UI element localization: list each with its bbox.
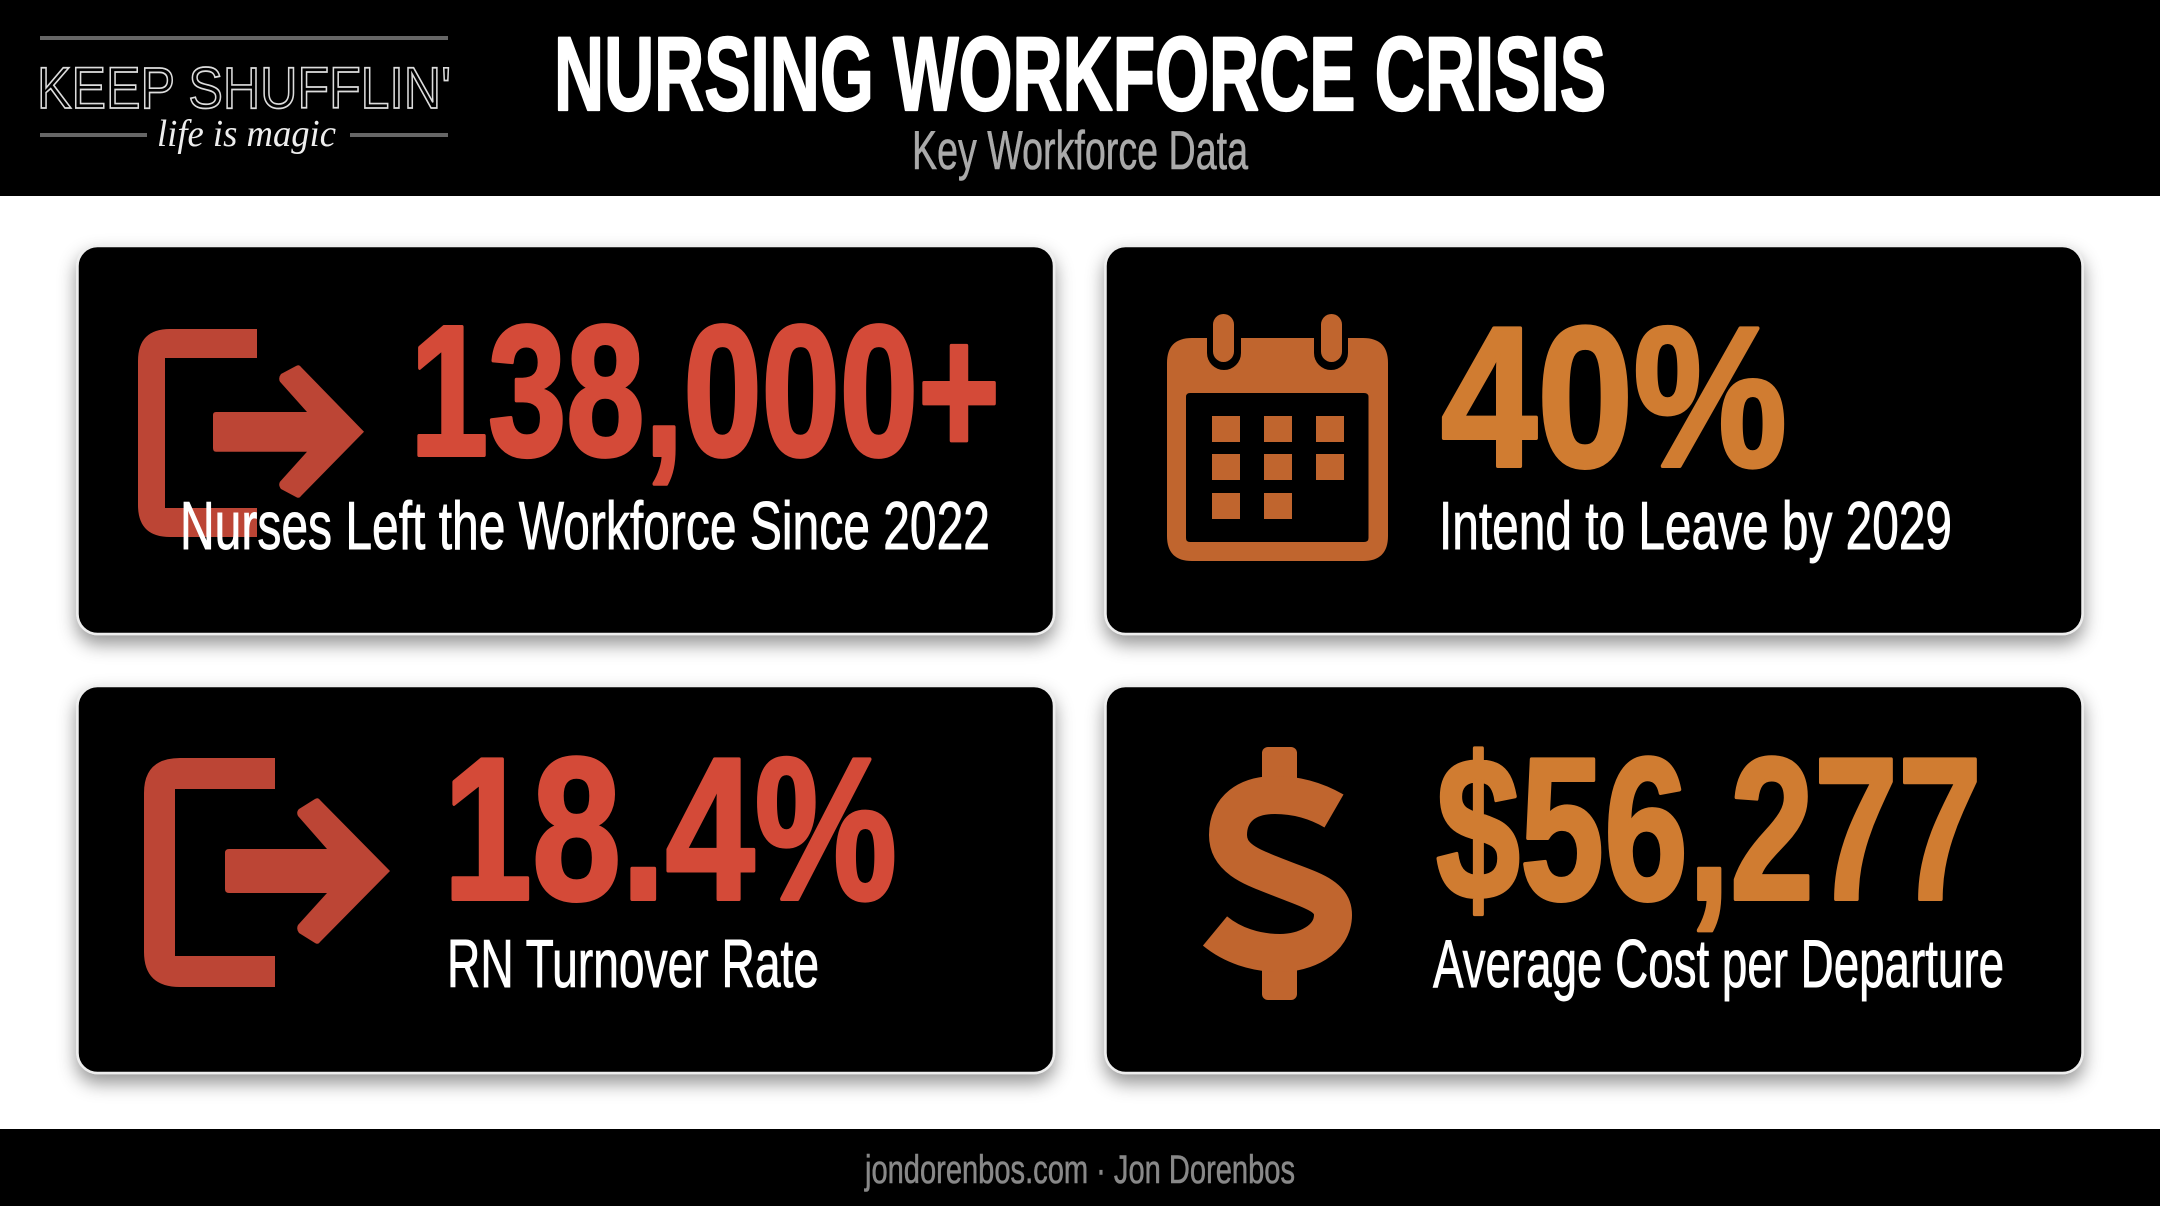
icon: calendar bbox=[1167, 314, 1388, 561]
stat: 18.4%: 18.4% bbox=[443, 716, 897, 943]
footer text: jondorenbos.com · Jon Dorenbos bbox=[864, 1148, 1295, 1192]
icon: exit arrow bbox=[138, 329, 364, 537]
subtitle: Key Workforce Data bbox=[912, 119, 1248, 181]
panel: intend to leave bbox=[1106, 246, 2082, 634]
title: NURSING WORKFORCE CRISIS bbox=[554, 16, 1606, 133]
footer band bbox=[0, 1129, 2160, 1206]
label: RN Turnover Rate bbox=[447, 926, 819, 1002]
logo: Keep Shufflin': life is magic bbox=[157, 113, 336, 155]
logo: Keep Shufflin' bbox=[37, 36, 451, 155]
panel: turnover bbox=[78, 686, 1054, 1073]
stat: $56,277: $56,277 bbox=[1436, 716, 1982, 943]
stat: 138,000+: 138,000+ bbox=[410, 288, 1000, 495]
icon: exit arrow bbox=[144, 758, 390, 987]
icon: dollar sign bbox=[1215, 747, 1334, 1000]
panel: nurses left bbox=[78, 246, 1054, 634]
label: Nurses Left the Workforce Since 2022 bbox=[180, 488, 990, 564]
header band bbox=[0, 0, 2160, 196]
logo: Keep Shufflin': KEEP SHUFFLIN' bbox=[37, 56, 451, 121]
label: Intend to Leave by 2029 bbox=[1439, 488, 1952, 564]
panel: cost bbox=[1106, 686, 2082, 1073]
stat: 40%: 40% bbox=[1441, 286, 1787, 509]
